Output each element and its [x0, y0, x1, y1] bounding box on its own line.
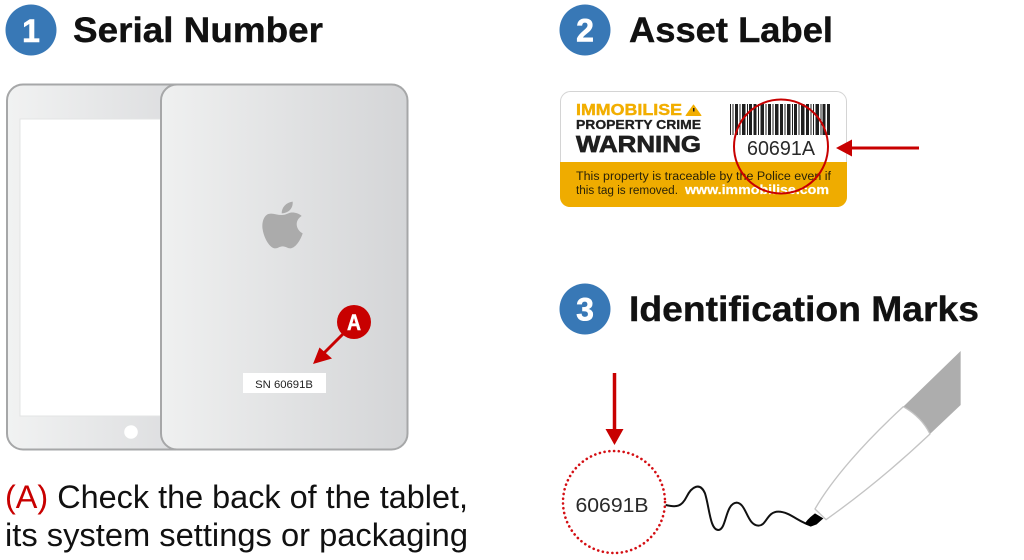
arrow: down to mark: [606, 373, 624, 445]
sticker heading text: IMMOBILISE: [576, 102, 682, 119]
caption: where to check: its system settings or packaging: [5, 517, 468, 553]
badge: number 1: [6, 4, 56, 56]
dotted mark circle: 60691B: [576, 495, 648, 517]
squiggle line: [666, 487, 811, 530]
serial number tag: [243, 373, 326, 393]
tablet back: [161, 84, 408, 450]
badge: number 2: [560, 4, 610, 56]
sticker heading text: [576, 102, 701, 157]
tablet illustration: [7, 84, 408, 450]
sticker body: [560, 92, 847, 207]
serial number tag: SN 60691B: [255, 379, 313, 391]
badge: number 2: 2: [576, 12, 594, 48]
asset label sticker: [560, 92, 919, 207]
caption: where to check: [5, 479, 468, 553]
highlight circle: [734, 100, 828, 194]
heading: identification marks: [560, 284, 979, 334]
asset number: 60691A: [747, 138, 816, 160]
icon: warning triangle: [686, 105, 701, 116]
badge: number 3: [560, 284, 610, 334]
title: serial number: Serial Number: [73, 11, 323, 50]
heading: asset label: [560, 4, 833, 56]
title: asset label: Asset Label: [629, 11, 833, 50]
pen: [805, 351, 961, 527]
pen tip: [805, 513, 823, 527]
sticker notice text: [576, 171, 832, 197]
tablet front: [7, 84, 192, 450]
barcode: [730, 104, 830, 135]
caption: where to check: (A) Check the back of the tablet,: [5, 479, 468, 515]
pen grip: [903, 351, 961, 434]
sticker heading text: PROPERTY CRIME: [576, 118, 701, 132]
dotted mark circle: [563, 451, 665, 553]
sticker notice text: www.immobilise.com: [684, 183, 829, 197]
arrow: A pointer: [313, 334, 343, 364]
sticker heading text: WARNING: [576, 131, 701, 157]
badge: A: [337, 305, 371, 339]
sticker notice text: This property is traceable by the Police even if: [576, 171, 832, 183]
pen body: [815, 407, 930, 520]
heading: serial number: [6, 4, 323, 56]
arrow: to asset number: [836, 140, 919, 156]
badge: number 3: 3: [576, 292, 594, 328]
title: identification marks: Identification Marks: [629, 290, 979, 329]
sticker notice text: this tag is removed.: [576, 185, 678, 197]
icon: apple logo: [262, 202, 303, 248]
badge: number 1: 1: [22, 13, 40, 49]
badge: A: A: [347, 310, 361, 335]
